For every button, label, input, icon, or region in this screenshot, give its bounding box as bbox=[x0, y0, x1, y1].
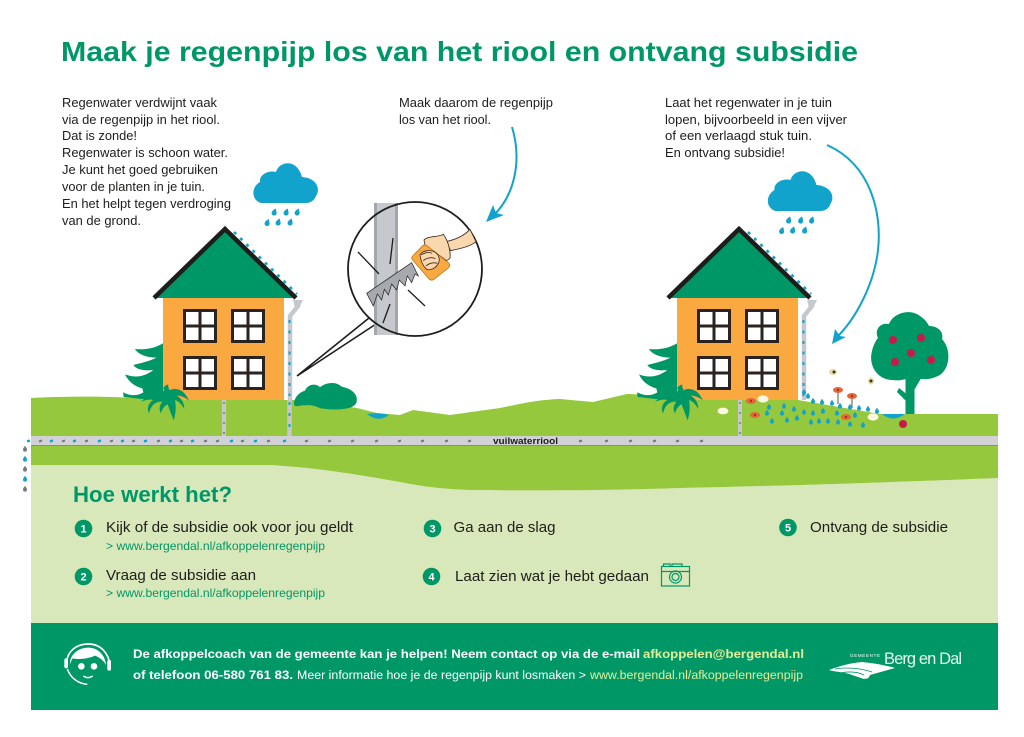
text block: left intro: Dat is zonde! bbox=[62, 128, 137, 143]
sewer pipe bbox=[27, 436, 998, 446]
flowers and infiltrating water bbox=[718, 387, 879, 428]
house right bbox=[637, 229, 817, 436]
footer text bbox=[133, 647, 804, 682]
text block: left intro: En het helpt tegen verdroging bbox=[62, 196, 231, 211]
step 2: 2 bbox=[80, 572, 87, 584]
step 1: 1 bbox=[80, 524, 87, 536]
drain bbox=[222, 400, 226, 436]
icon: headset coach bbox=[64, 644, 111, 684]
footer text: Meer informatie hoe je de regenpijp kunt losmaken > bbox=[297, 668, 586, 682]
title: Maak je regenpijp los van het riool en ontvang subsidie bbox=[61, 36, 858, 67]
step 1 bbox=[75, 519, 354, 553]
heading: hoe werkt het: Hoe werkt het? bbox=[73, 482, 232, 507]
step 1: > www.bergendal.nl/afkoppelenregenpijp bbox=[106, 539, 325, 553]
logo: Berg en Dal bbox=[884, 650, 962, 668]
footer text: afkoppelen@bergendal.nl bbox=[643, 647, 804, 661]
footer text: of telefoon 06-580 761 83. bbox=[133, 668, 293, 682]
bush bbox=[294, 383, 357, 409]
pipe label: vuilwaterriool bbox=[493, 436, 558, 447]
cloud right bbox=[768, 171, 832, 234]
bees bbox=[829, 369, 874, 384]
text block: left intro: Je kunt het goed gebruiken bbox=[62, 162, 218, 177]
text block: left intro: Regenwater is schoon water. bbox=[62, 145, 228, 160]
logo: GEMEENTE bbox=[850, 653, 880, 658]
house left bbox=[123, 229, 303, 436]
drops dripping from pipe bbox=[23, 446, 27, 492]
step 3: Ga aan de slag bbox=[454, 519, 556, 536]
step 2 bbox=[75, 567, 325, 600]
icon: camera bbox=[662, 564, 690, 586]
step 3: 3 bbox=[429, 524, 436, 536]
light green panel bbox=[31, 465, 998, 623]
ground bbox=[31, 394, 998, 436]
text block: right intro: lopen, bijvoorbeeld in een vijver bbox=[665, 112, 848, 127]
text block: middle intro: Maak daarom de regenpijp bbox=[399, 95, 553, 110]
step 2: Vraag de subsidie aan bbox=[106, 567, 256, 584]
step 4: 4 bbox=[428, 572, 435, 584]
arrow: middle bbox=[486, 127, 516, 222]
text block: right intro: Laat het regenwater in je tuin bbox=[665, 95, 832, 110]
text block: left intro: voor de planten in je tuin. bbox=[62, 179, 205, 194]
step 2: > www.bergendal.nl/afkoppelenregenpijp bbox=[106, 586, 325, 600]
tree bbox=[871, 312, 948, 428]
footer text: De afkoppelcoach van de gemeente kan je helpen! Neem contact op via de e-mail bbox=[133, 647, 640, 661]
text block: middle intro bbox=[399, 95, 553, 127]
step 5: Ontvang de subsidie bbox=[810, 519, 948, 536]
grey drops in pipe bbox=[39, 440, 703, 442]
text block: left intro: via de regenpijp in het riool. bbox=[62, 112, 220, 127]
pipe drops bbox=[27, 440, 286, 442]
lower ground bbox=[31, 446, 998, 490]
text block: middle intro: los van het riool. bbox=[399, 112, 491, 127]
step 4: Laat zien wat je hebt gedaan bbox=[455, 568, 649, 585]
pond right bbox=[882, 414, 905, 418]
cloud left bbox=[253, 163, 318, 226]
text block: left intro: van de grond. bbox=[62, 213, 141, 228]
footer text: www.bergendal.nl/afkoppelenregenpijp bbox=[589, 668, 803, 682]
text block: right intro: En ontvang subsidie! bbox=[665, 145, 785, 160]
arrow: right bbox=[827, 145, 879, 344]
step 1: Kijk of de subsidie ook voor jou geldt bbox=[106, 519, 354, 536]
left downpipe to sewer bbox=[287, 400, 292, 436]
text block: right intro: of een verlaagd stuk tuin. bbox=[665, 128, 812, 143]
text block: left intro: Regenwater verdwijnt vaak bbox=[62, 95, 217, 110]
pond left bbox=[367, 413, 389, 419]
text block: right intro bbox=[665, 95, 848, 160]
footer band bbox=[31, 623, 998, 710]
logo bbox=[829, 650, 962, 679]
text block: left intro bbox=[62, 95, 231, 228]
step 5: 5 bbox=[785, 522, 791, 534]
callout: saw bbox=[297, 190, 484, 376]
